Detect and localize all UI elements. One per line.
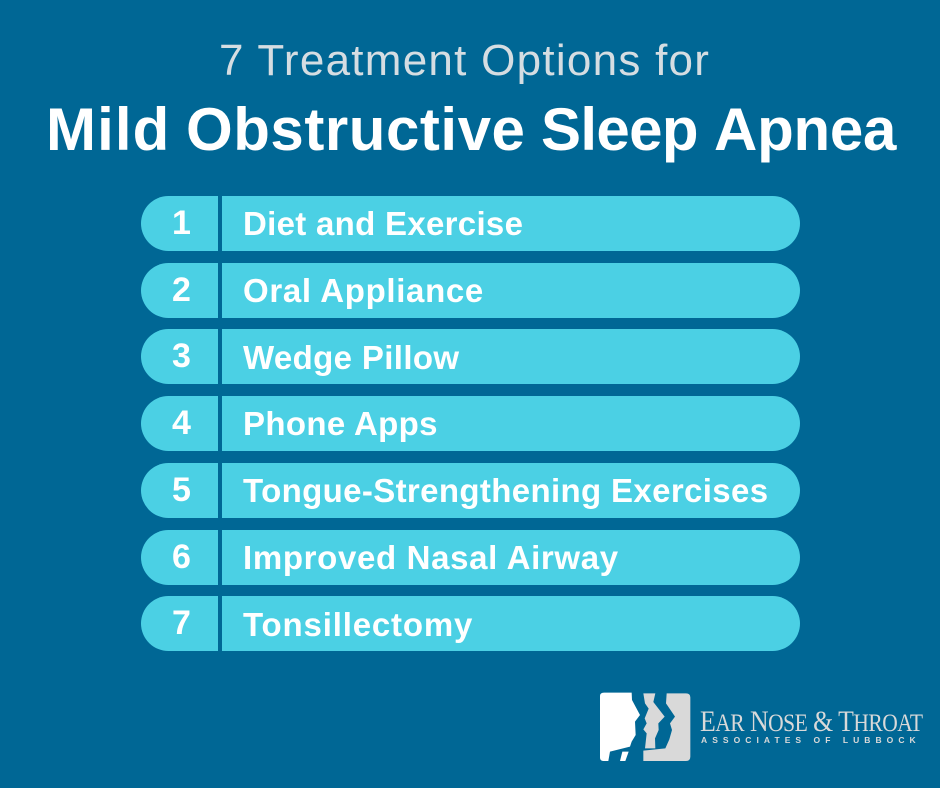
main title: Sleep bbox=[541, 96, 698, 163]
main title: Mild bbox=[46, 96, 170, 163]
option 6: Improved Nasal Airway bbox=[243, 539, 619, 576]
list of treatment options bbox=[141, 196, 800, 651]
option 6: 6 bbox=[172, 538, 191, 576]
option 5: 5 bbox=[172, 471, 191, 509]
option 1: 1 bbox=[172, 204, 191, 242]
option 2 bbox=[141, 263, 800, 318]
option 4: Phone Apps bbox=[243, 405, 438, 442]
option 3: 3 bbox=[172, 337, 191, 375]
option 7: 7 bbox=[172, 604, 191, 642]
main title bbox=[46, 96, 897, 163]
logo: Ear Nose & Throat Associates of Lubbock bbox=[600, 692, 923, 761]
logo wordmark: EAR NOSE & THROAT bbox=[700, 705, 923, 738]
icon: three face profiles bbox=[600, 692, 690, 761]
option 2: 2 bbox=[172, 271, 191, 309]
option 2: Oral Appliance bbox=[243, 272, 484, 309]
option 3: Wedge Pillow bbox=[243, 339, 459, 376]
option 1: Diet and Exercise bbox=[243, 205, 523, 242]
option 7: Tonsillectomy bbox=[243, 606, 473, 643]
subtitle heading: 7 Treatment Options for bbox=[219, 36, 710, 85]
option 7 bbox=[141, 596, 800, 651]
logo tagline: ASSOCIATES OF LUBBOCK bbox=[701, 735, 921, 745]
option 6 bbox=[141, 530, 800, 585]
option 3 bbox=[141, 329, 800, 384]
main title: Apnea bbox=[714, 96, 896, 163]
option 1 bbox=[141, 196, 800, 251]
main title: Obstructive bbox=[186, 96, 525, 163]
option 4 bbox=[141, 396, 800, 451]
option 5 bbox=[141, 463, 800, 518]
option 4: 4 bbox=[172, 404, 191, 442]
option 5: Tongue-Strengthening Exercises bbox=[243, 472, 768, 509]
